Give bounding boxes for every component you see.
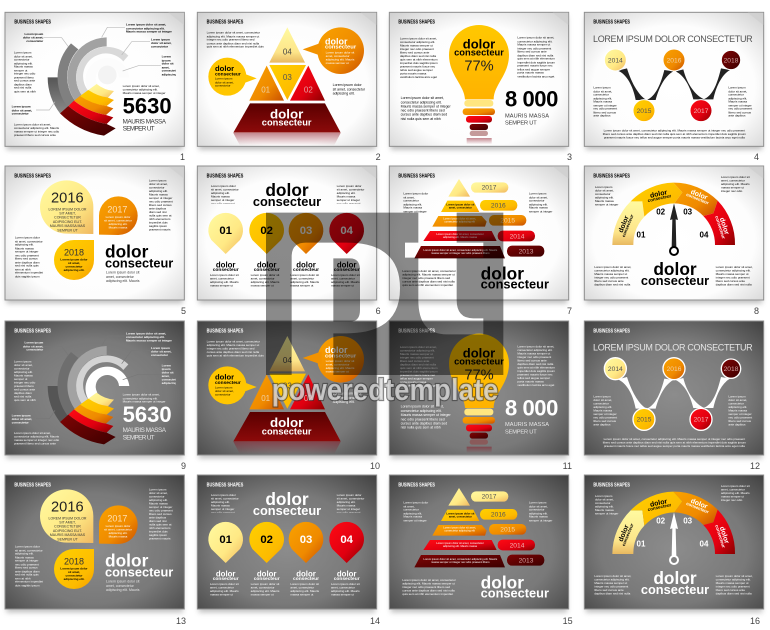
big number: 8 000 [505, 395, 558, 420]
heading: BUSINESS SHAPES [398, 20, 435, 26]
triangle 02 [290, 374, 325, 409]
pyramid base: consecteur [262, 118, 312, 128]
slide 6: light pins [197, 166, 377, 303]
subtitle: MAURIS MASSA [123, 427, 167, 434]
big heading: consecteur [253, 194, 321, 209]
column 2 text [251, 569, 282, 597]
headline: LOREM IPSUM DOLOR CONSECTETUR [593, 34, 753, 44]
gauge segment 3: dolor [689, 498, 709, 511]
subtitle: MAURIS MASSA [505, 113, 549, 119]
big heading [253, 489, 321, 518]
gauge segment 2 [631, 183, 682, 217]
circle 2017 [690, 100, 712, 122]
ring chart [48, 37, 129, 136]
wave connectors [618, 377, 730, 409]
pin 01 [208, 522, 243, 563]
gauge labels: 02 [656, 516, 666, 525]
circle 2016 [663, 49, 685, 71]
teardrop 2016: LOREM IPSUM DOLOR SIT AMET, CONSECTETUR ADIPISCING ELIT. MAURIS MASSA MAS SEMPER UT [49, 207, 86, 232]
column 3 text: dolor [296, 260, 316, 269]
tier 5: Lorem ipsum dolor sit amet, consectetur adipiscing elit. Mauris massa semper ut integer nec odio praesent libero [424, 558, 497, 564]
column 2 text [251, 260, 282, 288]
gauge segment 1: consecteur [621, 523, 635, 547]
base reflection [233, 442, 341, 454]
triangle 04 [269, 336, 305, 371]
triangle 01 [249, 374, 284, 409]
slide numbers: 2 [376, 152, 381, 162]
bulb [449, 334, 509, 408]
yellow bubble: dolor [215, 64, 234, 73]
circle 2017: 2017 [694, 108, 709, 115]
bulb: consecteur [454, 48, 504, 58]
teardrop 2016: LOREM IPSUM DOLOR SIT AMET, CONSECTETUR ADIPISCING ELIT. MAURIS MASSA MAS SEMPER UT [49, 516, 86, 541]
big heading: consecteur [481, 277, 549, 292]
watermark logo: pt cut out of gray box [266, 213, 503, 375]
subtitle: MAURIS MASSA [123, 118, 167, 125]
circle 2014: 2014 [608, 366, 623, 373]
circle 2016: 2016 [667, 366, 682, 373]
big number: 5630 [123, 402, 172, 427]
teardrop 2018 [54, 549, 94, 589]
slide 9: dark concentric rings [5, 321, 184, 458]
gauge segment 3: dolor [689, 189, 709, 202]
big heading: dolor [105, 241, 149, 261]
tier 3: Lorem ipsum dolor sit amet, consectetur adipiscing elit [443, 217, 476, 223]
heading: BUSINESS SHAPES [14, 328, 51, 334]
gauge labels [637, 516, 709, 548]
column 3 text [290, 260, 322, 288]
tier 5 [414, 555, 505, 567]
slide numbers: 4 [754, 152, 759, 162]
slide numbers: 3 [567, 152, 572, 162]
bulb base bars [463, 100, 495, 144]
pin 02: 02 [260, 534, 273, 546]
slide numbers: 14 [370, 616, 380, 626]
gauge segment 2: consecteur [647, 502, 672, 512]
heading: BUSINESS SHAPES [593, 173, 630, 179]
column 1 text: consecteur [213, 267, 239, 273]
big heading: dolor [265, 489, 309, 509]
needle [670, 512, 678, 564]
big heading [641, 568, 709, 597]
big heading [481, 572, 549, 601]
gauge labels: 04 [700, 539, 709, 548]
triangle 01: 01 [261, 85, 271, 94]
circle 2016: 2016 [667, 57, 682, 64]
slide 2: light triangle pyramid [197, 12, 377, 150]
orange bubble: consecteur [325, 353, 357, 359]
tier 3 [432, 216, 487, 227]
slide numbers: 9 [181, 461, 186, 471]
gauge segment 1: dolor [618, 215, 631, 234]
pin 01 [208, 213, 243, 254]
gauge labels: 04 [700, 230, 709, 239]
pill 2017 [471, 182, 508, 193]
heading: BUSINESS SHAPES [207, 173, 243, 179]
gauge segment 4: consecteur [714, 215, 726, 240]
tier 4 [423, 540, 497, 550]
column 2 text: dolor [257, 569, 276, 578]
pin 03: 03 [300, 225, 312, 237]
big heading: consecteur [641, 273, 709, 288]
slide 5: light teardrops [5, 166, 184, 303]
gauge segment 2: dolor [649, 189, 668, 200]
slide 14: dark pins [197, 475, 377, 612]
column 2 text: consecteur [254, 267, 280, 273]
gauge segment 4 [703, 510, 735, 554]
pill 2017: 2017 [482, 185, 497, 192]
circle 2015: 2015 [637, 108, 652, 115]
big number: 5630 [123, 93, 172, 118]
triangle 03 [269, 374, 306, 409]
pill 2016: 2016 [491, 511, 506, 518]
big heading: consecteur [105, 256, 173, 271]
teardrop 2016 [40, 180, 93, 234]
gauge segment 4: consecteur [714, 524, 726, 549]
slide numbers: 11 [563, 461, 572, 471]
slide numbers: 7 [567, 306, 572, 316]
slide 8: light gauge [584, 166, 764, 303]
big heading [481, 263, 549, 292]
column 4 text: dolor [337, 569, 356, 578]
heading: BUSINESS SHAPES [207, 328, 243, 334]
big heading: dolor [265, 180, 309, 200]
pin 02: 02 [260, 225, 273, 237]
tier 2: Lorem ipsum dolor sit amet, consectetur [446, 203, 474, 209]
slide numbers: 15 [563, 616, 573, 626]
tier 2 [441, 201, 479, 212]
bulb: dolor [463, 37, 495, 52]
pill 2014 [498, 231, 535, 241]
column 4 text: dolor [337, 260, 356, 269]
ring chart [48, 346, 129, 444]
gauge segment 3: consecteur [685, 501, 710, 515]
slide numbers [176, 152, 760, 626]
big number: 8 000 [505, 87, 558, 112]
pill 2016 [480, 200, 517, 211]
pill 2017 [471, 491, 508, 502]
bulb: consecteur [454, 356, 504, 366]
big heading [105, 241, 173, 271]
circle 2015: 2015 [637, 417, 652, 424]
orange bubble [303, 27, 364, 74]
pyramid base: dolor [270, 106, 303, 121]
circle 2017 [690, 408, 712, 430]
pill 2015 [489, 215, 526, 226]
circle 2018: 2018 [724, 366, 739, 373]
slide numbers: 10 [370, 461, 380, 471]
yellow bubble [208, 366, 257, 404]
slide numbers: 16 [750, 616, 760, 626]
slide numbers: 5 [181, 306, 186, 316]
gauge segment 2: consecteur [647, 193, 672, 203]
heading: BUSINESS SHAPES [14, 173, 51, 179]
heading: BUSINESS SHAPES [593, 328, 630, 334]
subtitle: MAURIS MASSA [505, 422, 549, 428]
tier 3: Lorem ipsum dolor sit amet, consectetur adipiscing elit [443, 526, 476, 532]
gauge segment 1: dolor [618, 524, 631, 543]
wave connectors [618, 68, 730, 100]
slide 10: dark triangle pyramid [197, 321, 377, 458]
subtitle line 2: SEMPER UT [123, 434, 155, 441]
subtitle line 2: SEMPER UT [505, 121, 537, 127]
big heading: consecteur [481, 586, 549, 601]
pyramid base: consecteur [262, 426, 312, 436]
tier 4: Lorem ipsum dolor sit amet, consectetur adipiscing elit. Mauris massa [436, 233, 484, 239]
pyramid base [233, 103, 341, 133]
triangle 03: 03 [283, 382, 292, 391]
tier 2 [441, 510, 479, 521]
teardrop 2016 [40, 489, 93, 543]
pyramid base: dolor [270, 415, 303, 430]
triangle 01: 01 [261, 394, 271, 403]
circle 2014: 2014 [608, 57, 623, 64]
gauge segment 4 [703, 201, 735, 245]
big heading: consecteur [253, 503, 321, 518]
tier 5: Lorem ipsum dolor sit amet, consectetur adipiscing elit. Mauris massa semper ut integer nec odio praesent libero [424, 249, 497, 255]
big heading: dolor [481, 263, 524, 283]
bulb base bars [463, 409, 495, 453]
leader lines [36, 336, 161, 419]
pill 2016: 2016 [491, 202, 506, 209]
yellow bubble: consecteur [215, 71, 241, 77]
column 4 text: consecteur [334, 576, 360, 582]
slide 1: light concentric rings [5, 12, 184, 150]
circle 2015 [633, 100, 655, 122]
bulb [449, 25, 509, 99]
triangle 01 [249, 66, 284, 101]
triangle 04 [269, 27, 305, 63]
column 1 text [210, 569, 241, 597]
gauge labels: 01 [637, 539, 646, 548]
triangle 03: 03 [283, 73, 292, 82]
circle 2015 [633, 408, 655, 430]
pin 04 [329, 213, 364, 254]
pill 2013: 2013 [519, 557, 534, 564]
needle [670, 203, 678, 255]
right text: Lorem ipsum dolor sit amet, consectetur adipiscing elit. [333, 392, 365, 404]
column 2 text: consecteur [254, 576, 280, 582]
gauge segment 3: consecteur [685, 192, 710, 206]
heading: BUSINESS SHAPES [398, 173, 435, 179]
circle 2016 [663, 358, 685, 380]
slide 7: light stepped pyramid [389, 166, 569, 303]
slide numbers: 6 [376, 306, 381, 316]
heading: BUSINESS SHAPES [593, 20, 630, 26]
gauge segment 1 [612, 510, 644, 554]
pin 03 [289, 213, 323, 254]
circle 2018 [721, 50, 741, 70]
pin 02 [249, 213, 284, 254]
column 1 text [210, 260, 241, 288]
tier 4: Lorem ipsum dolor sit amet, consectetur adipiscing elit. Mauris massa [436, 542, 484, 548]
big heading: dolor [105, 550, 149, 570]
gauge labels: 02 [656, 207, 666, 216]
pin 01: 01 [219, 225, 232, 237]
pill 2013 [507, 246, 544, 257]
slide 13: dark teardrops [5, 475, 184, 612]
heading: BUSINESS SHAPES [398, 482, 435, 488]
slide 16: dark gauge [584, 475, 764, 612]
teardrop 2017 [99, 196, 138, 235]
tier 1 [448, 179, 470, 197]
gauge segment 1: consecteur [621, 214, 635, 238]
triangle 02: 02 [304, 85, 313, 94]
pin 03 [289, 522, 323, 563]
pill 2014: 2014 [510, 542, 525, 549]
big heading [253, 180, 321, 209]
teardrop 2017: 2017 [107, 514, 127, 524]
teardrop 2018 [54, 240, 94, 280]
pill 2017: 2017 [482, 494, 497, 501]
orange bubble: dolor [325, 36, 348, 46]
slide 11: dark light bulb [389, 321, 569, 458]
slide numbers: 13 [176, 616, 186, 626]
column 3 text [290, 569, 322, 597]
headline: LOREM IPSUM DOLOR CONSECTETUR [593, 343, 753, 353]
triangle 02: 02 [304, 394, 313, 403]
pyramid base [233, 412, 341, 441]
pill 2013 [507, 555, 544, 566]
subtitle line 2: SEMPER UT [505, 429, 537, 435]
pin 01: 01 [219, 534, 232, 546]
circle 2018: 2018 [724, 57, 739, 64]
tier 1 [448, 488, 470, 506]
orange bubble [303, 336, 364, 383]
teardrop 2016: 2016 [51, 191, 84, 207]
tier 4 [423, 231, 497, 241]
heading: BUSINESS SHAPES [14, 20, 51, 26]
slide 15: dark stepped pyramid [389, 475, 569, 612]
subtitle line 2: SEMPER UT [123, 126, 155, 133]
heading: BUSINESS SHAPES [593, 482, 630, 488]
triangle 04: 04 [283, 47, 292, 56]
pill 2014 [498, 540, 535, 550]
gauge segment 2 [631, 492, 682, 526]
pill 2016 [480, 509, 517, 520]
bulb: 77% [464, 367, 494, 383]
column 3 text: dolor [296, 569, 316, 578]
pin 03: 03 [300, 534, 312, 546]
circle 2014 [604, 358, 626, 380]
column 1 text: consecteur [213, 576, 239, 582]
watermark text: poweredtemplate [272, 373, 498, 407]
big heading: dolor [481, 572, 524, 592]
gauge segment 2: dolor [649, 498, 668, 509]
slide numbers: 8 [754, 306, 759, 316]
big heading: consecteur [641, 582, 709, 597]
pill 2013: 2013 [519, 248, 534, 255]
column 1 text: dolor [216, 569, 235, 578]
triangle 03 [269, 65, 306, 100]
big heading: dolor [653, 568, 697, 588]
circle 2014 [604, 49, 626, 71]
gauge segment 3 [673, 183, 718, 216]
heading: BUSINESS SHAPES [207, 482, 243, 488]
big heading: dolor [653, 259, 697, 279]
slide 3: light light bulb [389, 12, 569, 150]
gauge segment 3 [673, 492, 718, 525]
big heading [641, 259, 709, 288]
slide 4: light timeline wave [584, 12, 764, 150]
gauge labels: 03 [683, 207, 693, 216]
tier 5 [414, 246, 505, 258]
pin 04: 04 [340, 225, 354, 237]
triangle 04: 04 [283, 356, 292, 365]
gauge segment 1 [612, 201, 644, 245]
column 4 text [331, 569, 362, 597]
teardrop 2018: 2018 [64, 557, 84, 567]
pin 02 [249, 522, 284, 563]
big heading: consecteur [105, 565, 173, 580]
slide numbers: 12 [750, 461, 760, 471]
heading: BUSINESS SHAPES [14, 482, 51, 488]
circle 2017: 2017 [694, 417, 709, 424]
orange bubble: consecteur [325, 45, 357, 51]
teardrop 2018: 2018 [64, 248, 84, 258]
pill 2015 [489, 524, 526, 535]
heading: BUSINESS SHAPES [207, 20, 243, 26]
gauge labels [637, 207, 709, 239]
heading: BUSINESS SHAPES [398, 328, 435, 334]
column 3 text: consecteur [293, 576, 319, 582]
right text: Lorem ipsum dolor sit amet, consectetur adipiscing elit. [333, 83, 365, 95]
tier 2: Lorem ipsum dolor sit amet, consectetur [446, 512, 474, 518]
orange bubble: dolor [325, 345, 348, 355]
teardrop 2016: 2016 [51, 500, 84, 516]
tier 3 [432, 525, 487, 536]
column 4 text: consecteur [334, 267, 360, 273]
column 4 text [331, 260, 362, 288]
gauge segment 4: dolor [718, 526, 730, 545]
bulb: dolor [463, 345, 495, 360]
yellow bubble: consecteur [215, 380, 241, 386]
slide numbers: 1 [180, 152, 185, 162]
big heading [105, 550, 173, 580]
column 1 text: dolor [216, 260, 235, 269]
gauge segment 4: dolor [718, 217, 730, 236]
circle 2018 [721, 359, 741, 378]
teardrop 2017 [99, 505, 138, 544]
column 3 text: consecteur [293, 267, 319, 273]
teardrop 2017: 2017 [107, 205, 127, 215]
base reflection [233, 133, 341, 146]
gauge labels: 01 [637, 230, 646, 239]
bulb: 77% [464, 59, 494, 75]
pill 2015: 2015 [500, 218, 515, 225]
gauge labels: 03 [683, 516, 693, 525]
column 2 text: dolor [257, 260, 276, 269]
pill 2014: 2014 [510, 233, 525, 240]
yellow bubble [208, 58, 257, 96]
pin 04 [329, 522, 364, 563]
pin 04: 04 [340, 534, 354, 546]
pill 2015: 2015 [500, 527, 515, 534]
leader lines [36, 27, 161, 110]
triangle 02 [290, 66, 325, 101]
yellow bubble: dolor [215, 373, 234, 382]
slide 12: dark timeline wave [584, 321, 764, 458]
